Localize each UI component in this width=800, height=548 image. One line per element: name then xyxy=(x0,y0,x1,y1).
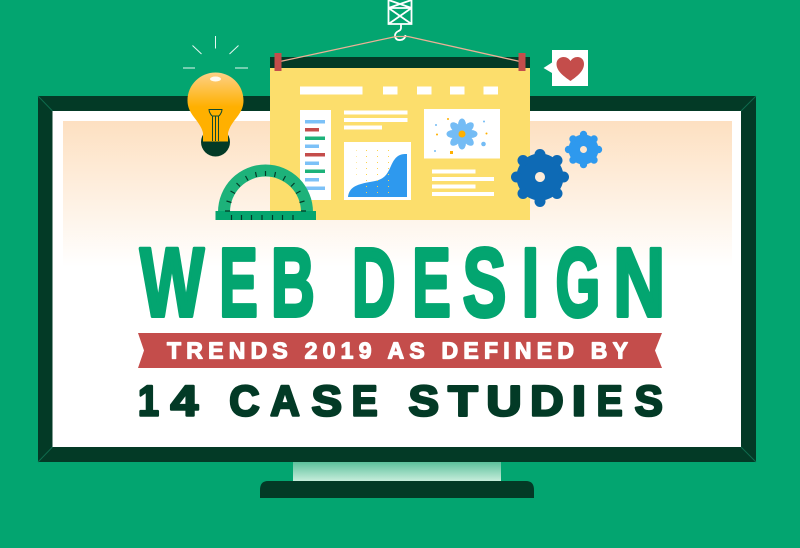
hanging crane hook xyxy=(388,0,412,40)
title: web design: I xyxy=(522,228,539,337)
title: web design: B xyxy=(271,228,315,337)
nav bar xyxy=(300,86,498,94)
icon: heart speech bubble xyxy=(544,50,588,86)
icon: small gear xyxy=(565,131,602,168)
text lines top xyxy=(344,110,408,130)
icon: light bulb xyxy=(183,36,248,156)
title: web design xyxy=(140,228,665,337)
monitor frame xyxy=(38,96,756,462)
hanging strings xyxy=(280,36,520,62)
board header xyxy=(270,57,530,68)
heading: 14 case studies: C xyxy=(229,378,260,426)
title: web design: N xyxy=(613,228,665,337)
title: web design: D xyxy=(352,228,396,337)
bulb socket xyxy=(201,128,230,156)
heading: 14 case studies: I xyxy=(572,378,586,426)
heading: 14 case studies: S xyxy=(408,378,439,426)
area chart xyxy=(344,142,411,200)
clip right xyxy=(518,53,526,71)
subtitle ribbon xyxy=(138,333,662,368)
heading: 14 case studies: 4 xyxy=(171,378,198,426)
icon: protractor xyxy=(216,165,316,220)
heading: 14 case studies: S xyxy=(312,378,342,426)
screen peach glow xyxy=(63,121,732,267)
clip left xyxy=(274,53,282,71)
heading: 14 case studies: A xyxy=(270,378,300,426)
icon: large gear xyxy=(511,149,569,207)
text lines bottom xyxy=(432,170,494,196)
heading: 14 case studies: E xyxy=(352,378,378,426)
flower image panel xyxy=(424,109,500,158)
monitor base xyxy=(260,481,534,498)
monitor xyxy=(38,96,756,498)
board body xyxy=(270,68,530,220)
monitor stand xyxy=(293,462,501,481)
heading: 14 case studies: T xyxy=(448,378,478,426)
title: web design: G xyxy=(556,228,600,337)
heading: 14 case studies: S xyxy=(635,378,663,426)
monitor screen xyxy=(52,111,741,447)
title: web design: E xyxy=(219,228,258,337)
bulb rays xyxy=(183,36,248,68)
heading: 14 case studies: E xyxy=(597,378,623,426)
subtitle text: TRENDS 2019 AS DEFINED BY xyxy=(167,338,628,364)
heading: 14 case studies: D xyxy=(530,378,564,426)
heading: 14 case studies xyxy=(138,378,663,426)
heading: 14 case studies: U xyxy=(486,378,522,426)
title: web design: S xyxy=(463,228,506,337)
bulb glass xyxy=(188,72,244,142)
website board xyxy=(270,57,530,220)
bulb filament xyxy=(209,110,222,141)
heading: 14 case studies: 1 xyxy=(138,378,159,426)
title: web design: E xyxy=(412,228,451,337)
list panel xyxy=(300,110,331,200)
title: web design: W xyxy=(140,228,204,337)
